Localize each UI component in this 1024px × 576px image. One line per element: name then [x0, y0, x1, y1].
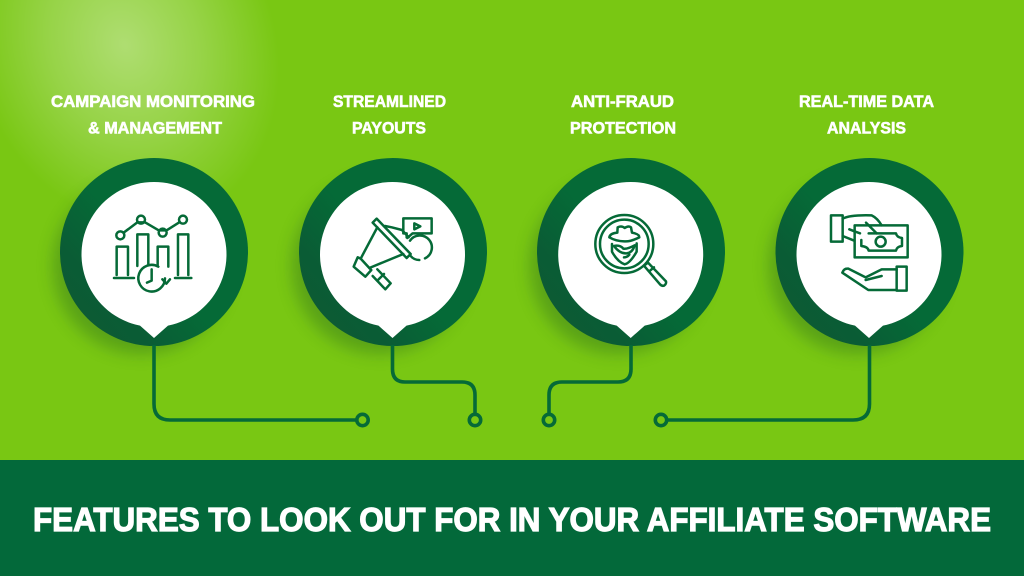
icon: bar chart with clock	[114, 216, 191, 292]
connector 2	[392, 345, 481, 426]
card: streamlined payouts	[292, 93, 487, 354]
icon: megaphone with video bubble	[354, 218, 432, 289]
pin badge	[530, 158, 725, 354]
heading: campaign monitoring	[51, 93, 255, 138]
connector 1	[154, 345, 368, 426]
card: anti-fraud protection	[530, 93, 725, 354]
heading: real-time data analysis: ANALYSIS	[827, 120, 906, 138]
heading: anti-fraud protection	[570, 93, 676, 138]
connector 4	[655, 345, 870, 426]
heading: real-time data analysis: REAL-TIME DATA	[799, 93, 934, 111]
pin badge	[53, 158, 248, 354]
pin badge	[769, 158, 964, 354]
banner	[0, 460, 1024, 576]
heading: anti-fraud protection: ANTI-FRAUD	[571, 93, 674, 111]
card: real-time data analysis	[769, 93, 964, 354]
card: campaign monitoring and management	[51, 93, 255, 354]
icon: magnifier with spy	[595, 215, 666, 286]
heading: campaign monitoring: & MANAGEMENT	[88, 120, 222, 138]
heading: anti-fraud protection: PROTECTION	[570, 120, 676, 138]
heading: streamlined payouts	[333, 93, 446, 138]
heading: real-time data analysis	[799, 93, 934, 138]
heading: campaign monitoring: CAMPAIGN MONITORING	[51, 93, 255, 111]
pin badge	[292, 158, 487, 354]
connector 3	[543, 345, 631, 426]
heading: streamlined payouts: PAYOUTS	[352, 120, 426, 138]
heading: streamlined payouts: STREAMLINED	[333, 93, 446, 111]
icon: hands exchanging money	[831, 215, 908, 291]
